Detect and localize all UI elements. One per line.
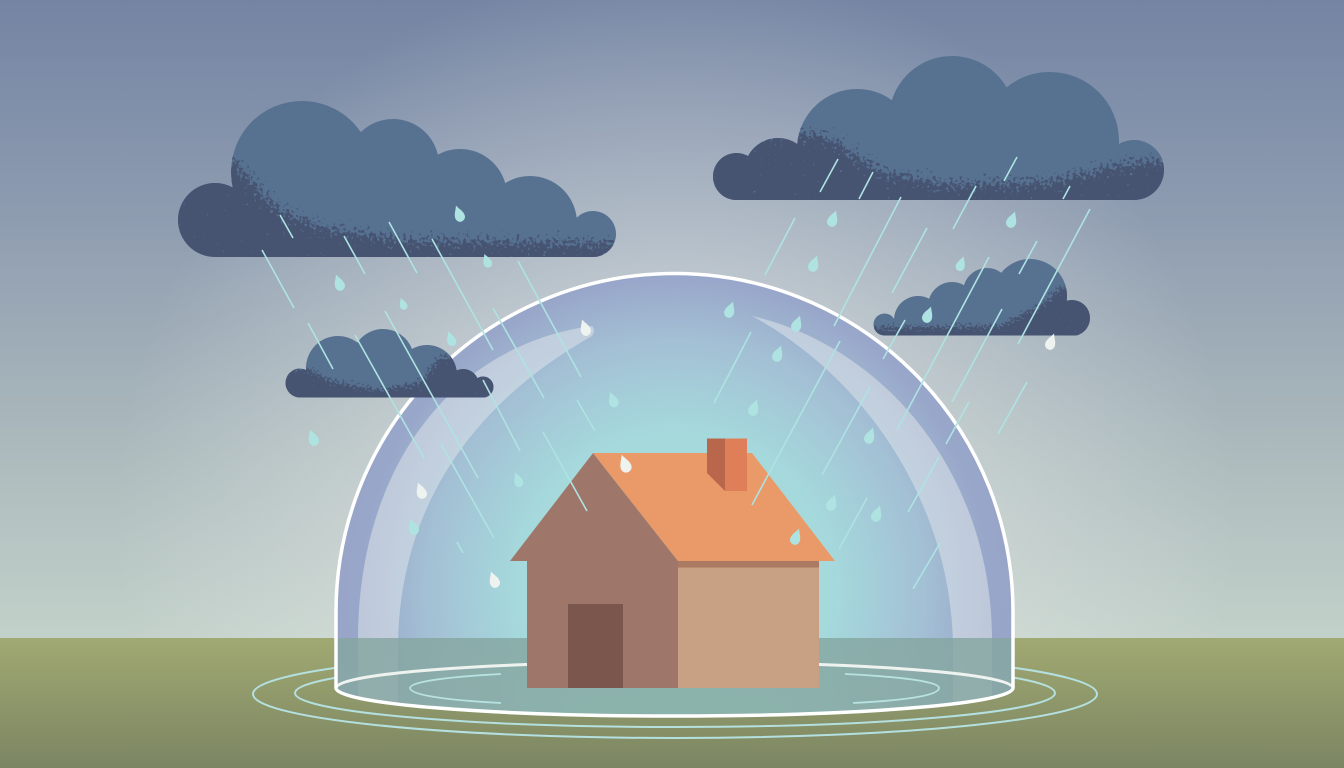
rain streaks [262,157,1090,589]
cloud: small left [286,329,494,398]
white rain drops [413,318,1059,589]
cloud: upper right [713,56,1164,200]
ground [0,638,1344,768]
dome outline [336,274,1013,716]
cloud: small right [874,259,1090,336]
cloud: upper left [178,101,616,257]
rain drops [305,204,1020,546]
dome right highlight [752,316,992,638]
house [510,438,835,688]
house left wall and gable [510,453,678,688]
water inside dome [336,638,1013,716]
house right wall [678,561,819,688]
dome base back edge [336,662,1013,688]
door [568,604,623,688]
dome highlights [358,316,992,638]
chimney [707,438,747,491]
dome body [336,274,1013,716]
dome left highlight [358,326,594,638]
inner ripples [410,674,939,703]
roof shadow strip [678,561,819,568]
roof [593,453,835,561]
water ripples [253,650,1097,738]
